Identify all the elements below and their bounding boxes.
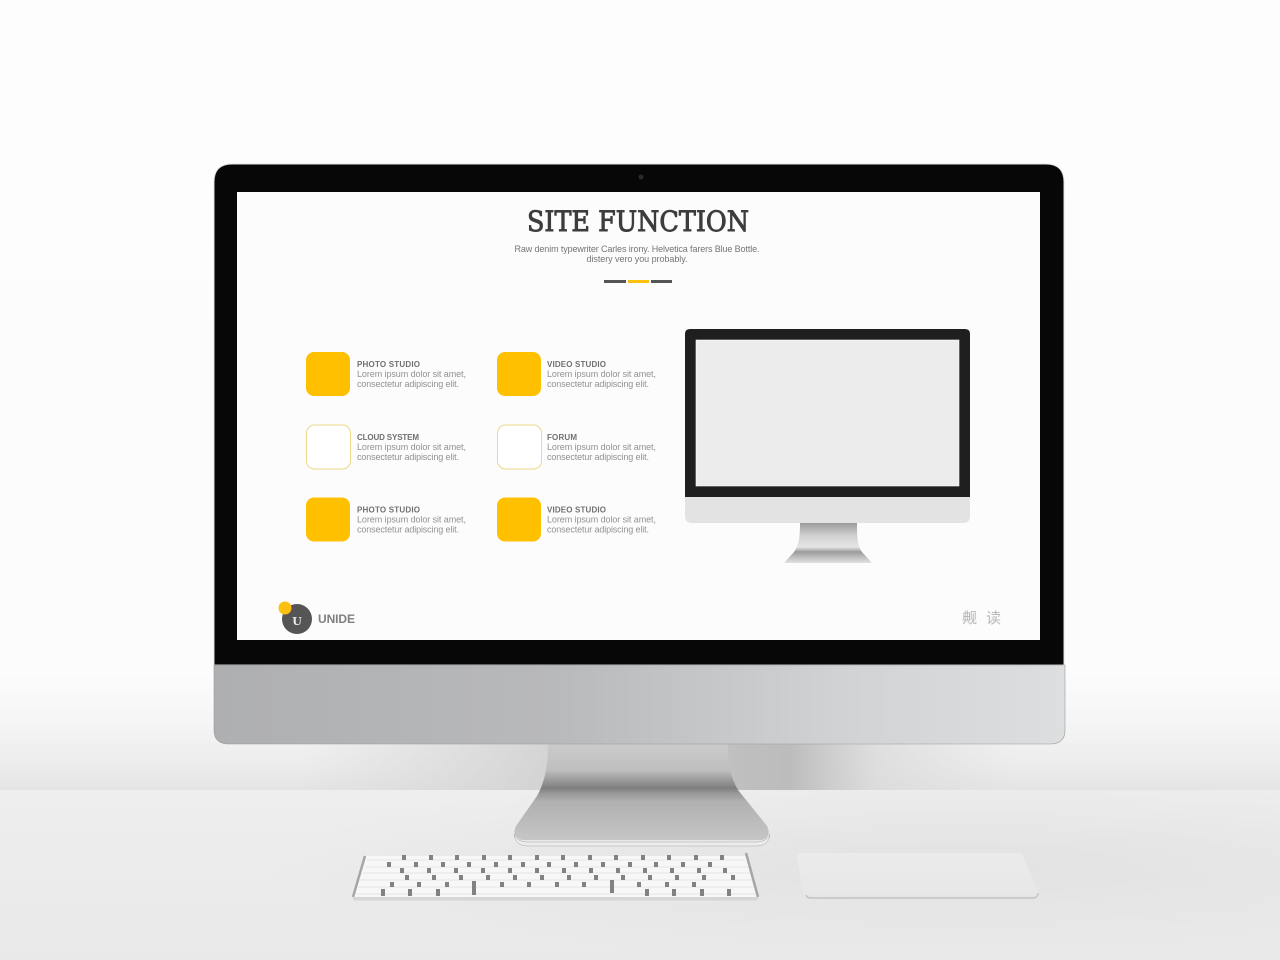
keyboard [353,853,758,900]
feature: cloud system: CLOUD SYSTEM [357,433,419,442]
feature: forum: consectetur adipiscing elit. [547,452,649,462]
slide title: SITE FUNCTION [527,205,749,238]
feature: video studio: VIDEO STUDIO [547,360,606,369]
slide subtitle: distery vero you probably. [586,254,688,264]
small monitor bezel [685,329,970,497]
feature: video studio [497,352,656,396]
feature: photo studio, second [306,498,466,542]
large monitor [214,164,1065,744]
keyboard edges [353,853,758,897]
screen [237,192,1040,640]
feature: cloud system: consectetur adipiscing elit. [357,452,459,462]
feature: photo studio: PHOTO STUDIO [357,360,420,369]
key gaps [381,855,735,896]
feature: photo studio, second: consectetur adipiscing elit. [357,524,459,534]
small monitor illustration [685,329,970,563]
feature: video studio, second: consectetur adipiscing elit. [547,524,649,534]
brand logo [278,602,355,634]
monitor shadow on wall [300,744,1020,790]
feature: photo studio [306,352,466,396]
trackpad [797,853,1038,898]
brand logo: UNIDE [318,612,355,626]
feature: photo studio, second: Lorem ipsum dolor sit amet, [357,514,466,524]
footer characters: 觍 读 [962,610,1001,627]
keyboard body [353,856,758,900]
feature: forum: FORUM [547,433,577,442]
feature: cloud system: Lorem ipsum dolor sit amet, [357,442,466,452]
feature: cloud system [306,425,466,469]
small monitor screen [696,340,959,486]
small monitor chin [685,497,970,523]
monitor chin [214,665,1065,744]
feature: video studio, second: Lorem ipsum dolor sit amet, [547,514,656,524]
feature: photo studio: consectetur adipiscing elit. [357,379,459,389]
monitor bezel [214,164,1064,665]
feature: photo studio: Lorem ipsum dolor sit amet, [357,369,466,379]
brand logo: U [292,615,302,628]
slide subtitle [514,244,760,264]
feature: photo studio, second: PHOTO STUDIO [357,506,420,514]
slide subtitle: Raw denim typewriter Carles irony. Helvetica farers Blue Bottle. [514,244,760,254]
feature: video studio, second [497,498,656,542]
feature: video studio: Lorem ipsum dolor sit amet, [547,369,656,379]
title divider [604,280,672,283]
large monitor stand [514,744,770,846]
desk surface [0,790,1280,960]
small monitor stand [784,523,872,563]
feature: forum [498,425,656,469]
feature: video studio: consectetur adipiscing elit. [547,379,649,389]
feature: forum: Lorem ipsum dolor sit amet, [547,442,656,452]
key row lines [356,860,756,894]
webcam [638,174,644,180]
feature: video studio, second: VIDEO STUDIO [547,506,606,514]
